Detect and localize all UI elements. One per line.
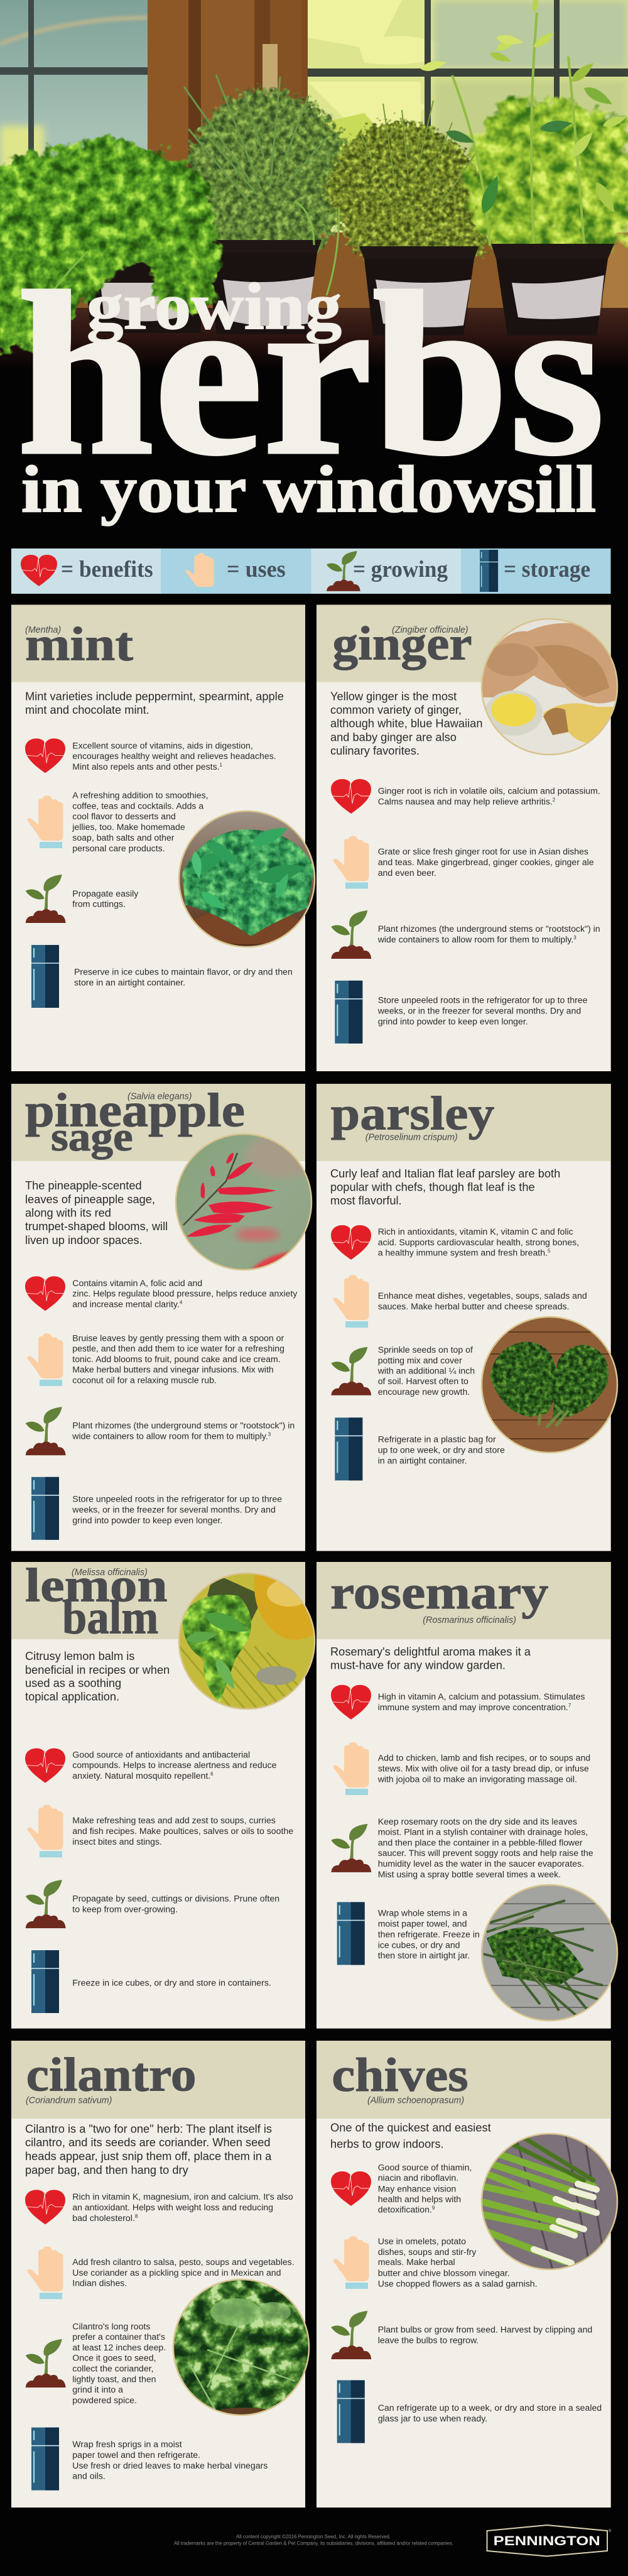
footer copyright: All trademarks are the property of Central Garden & Pet Company, its subsidiaries, divisions, affiliated and/or related companies.: [174, 2540, 453, 2546]
logo: Pennington: PENNINGTON: [494, 2534, 600, 2548]
benefits text: anxiety. Natural mosquito repellent.: [72, 1771, 210, 1781]
benefits text: 1: [220, 762, 223, 768]
uses text: cool flavor to desserts and: [72, 811, 176, 821]
icon: hand: [28, 2246, 63, 2299]
panel: ginger: [317, 605, 622, 1071]
heading: pineapple sage: [25, 1084, 245, 1160]
panel header band: [317, 1562, 611, 1639]
icon: seedling: [331, 1347, 371, 1395]
uses text: and fish recipes. Make poultices, salves or oils to soothe: [72, 1826, 293, 1836]
uses text: pestle, and then add them to ice water for a refreshing: [72, 1343, 284, 1353]
uses text: personal care products.: [72, 843, 165, 853]
icon: hand: [28, 1333, 63, 1386]
benefits text: Calms nausea and may help relieve arthritis.: [378, 797, 553, 807]
panel header band: [317, 2041, 611, 2119]
growing text: to keep from over-growing.: [72, 1904, 178, 1914]
title line: in your windowsill: in your windowsill: [21, 452, 596, 526]
panel body: [317, 1084, 611, 1551]
uses text: meals. Make herbal: [378, 2257, 455, 2267]
icon: heart: [331, 2171, 371, 2206]
growing text: leave the bulbs to regrow.: [378, 2335, 479, 2345]
benefits text: 9: [432, 2205, 435, 2211]
storage text: Freeze in ice cubes, or dry and store in containers.: [72, 1977, 271, 1987]
icon: heart: [25, 738, 65, 773]
scientific name: (Petroselinum crispum): [365, 1133, 458, 1143]
growing text: moist. Plant in a stylish container with drainage holes,: [378, 1826, 588, 1836]
photo: lemon balm and tea: [179, 1573, 315, 1710]
icon: heart: [331, 1685, 371, 1720]
storage text: then store in airtight jar.: [378, 1950, 470, 1960]
growing text: prefer a container that's: [72, 2332, 165, 2342]
legend label: growing: = growing: [353, 557, 448, 582]
icon: refrigerator: [31, 2428, 59, 2491]
heading: rosemary: rosemary: [330, 1566, 548, 1619]
uses text: Use in omelets, potato: [378, 2236, 466, 2246]
intro text: heads appear, just snip them off, place them in a: [25, 2149, 272, 2163]
storage text: paper towel and then refrigerate.: [72, 2450, 200, 2460]
growing text: of soil. Harvest often to: [378, 1376, 468, 1386]
storage text: Can refrigerate up to a week, or dry and store in a sealed: [378, 2403, 602, 2413]
growing text: Keep rosemary roots on the dry side and its leaves: [378, 1816, 577, 1826]
intro text: popular with chefs, though flat leaf is the: [330, 1181, 535, 1194]
scientific name: (Melissa officinalis): [72, 1568, 148, 1578]
legend label: uses: = uses: [227, 557, 286, 582]
storage text: in an airtight container.: [378, 1455, 467, 1465]
icon: refrigerator: [337, 2380, 365, 2443]
icon: hand: [28, 1804, 63, 1857]
growing text: wide containers to allow room for them to multiply.: [377, 934, 573, 944]
intro text: herbs to grow indoors.: [330, 2137, 444, 2151]
legend icon: heart: [21, 555, 57, 586]
heading: lemon balm: [25, 1559, 168, 1644]
icon: heart: [25, 1749, 65, 1783]
panel body: [11, 605, 305, 1071]
intro text: paper bag, and then hang to dry: [25, 2163, 189, 2176]
uses text: coffee, teas and cocktails. Adds a: [72, 800, 203, 810]
growing text: from cuttings.: [72, 898, 126, 909]
photo: potted herbs on a windowsill: [0, 0, 628, 377]
growing text: powdered spice.: [72, 2395, 137, 2405]
icon: refrigerator: [335, 1417, 362, 1480]
uses text: jellies, too. Make homemade: [72, 822, 185, 832]
legend icon: hand: [185, 553, 214, 592]
icon: seedling: [26, 1880, 66, 1928]
benefits text: Excellent source of vitamins, aids in digestion,: [72, 740, 253, 750]
photo: pineapple sage flowers: [176, 1134, 320, 1272]
icon: refrigerator: [31, 1477, 59, 1540]
panel body: [317, 2041, 611, 2508]
uses text: Indian dishes.: [72, 2278, 127, 2288]
panel header band: [317, 605, 611, 682]
growing text: Plant rhizomes (the underground stems or "rootstock") in: [378, 924, 600, 934]
growing text: potting mix and cover: [378, 1355, 462, 1365]
icon: hand: [333, 836, 369, 888]
storage text: Use fresh or dried leaves to make herbal vinegars: [72, 2460, 268, 2470]
uses text: Use coriander as a pickling spice and in Mexican and: [72, 2268, 281, 2278]
storage text: Store unpeeled roots in the refrigerator for up to three: [72, 1494, 282, 1504]
benefits text: health and helps with: [378, 2194, 461, 2204]
intro text: Curly leaf and Italian flat leaf parsley are both: [330, 1167, 560, 1180]
benefits text: acid. Supports cardiovascular health, strong bones,: [378, 1237, 579, 1247]
icon: hand: [333, 2236, 369, 2289]
scientific name: (Coriandrum sativum): [26, 2095, 112, 2105]
icon: seedling: [331, 2311, 371, 2359]
uses text: Add to chicken, lamb and fish recipes, or to soups and: [378, 1753, 590, 1763]
intro text: Cilantro is a "two for one" herb: The plant itself is: [25, 2122, 272, 2135]
heading: pineapple sage: pineapple: [25, 1084, 245, 1137]
uses text: Make herbal butters and vinegar infusions. Mix with: [72, 1365, 274, 1375]
growing text: humidity level as the water in the saucer evaporates.: [378, 1858, 584, 1869]
storage text: glass jar to use when ready.: [378, 2413, 487, 2423]
scientific name: (Rosmarinus officinalis): [423, 1615, 516, 1625]
benefits text: 7: [568, 1703, 571, 1708]
icon: heart: [331, 779, 371, 814]
benefits text: Ginger root is rich in volatile oils, calcium and potassium.: [378, 786, 600, 796]
benefits text: niacin and riboflavin.: [378, 2173, 458, 2183]
growing text: Plant rhizomes (the underground stems or "rootstock") in: [72, 1421, 295, 1431]
icon: heart: [25, 1276, 65, 1311]
scientific name: (Zingiber officinale): [392, 625, 468, 635]
photo: parsley bunches on wood: [481, 1317, 618, 1454]
heading: chives: chives: [332, 2049, 468, 2102]
heading: pineapple sage: sage: [51, 1114, 133, 1160]
legend icon: seedling: [327, 551, 360, 591]
benefits text: Rich in antioxidants, vitamin K, vitamin C and folic: [378, 1226, 573, 1236]
storage text: grind into powder to keep even longer.: [378, 1017, 528, 1027]
growing text: collect the coriander,: [72, 2364, 154, 2374]
uses text: stews. Mix with olive oil for a tasty bread dip, or infuse: [378, 1763, 589, 1773]
growing text: Once it goes to seed,: [72, 2352, 156, 2362]
icon: refrigerator: [31, 1950, 59, 2013]
benefits text: encourages healthy weight and relieves headaches.: [72, 751, 276, 761]
intro text: leaves of pineapple sage,: [25, 1192, 155, 1206]
growing text: Propagate easily: [72, 888, 139, 898]
uses text: soap, bath salts and other: [72, 832, 175, 843]
growing text: with an additional ¼ inch: [377, 1366, 475, 1376]
intro text: liven up indoor spaces.: [25, 1233, 143, 1247]
footer copyright: All content copyright ©2016 Pennington Seed, Inc. All rights Reserved.: [236, 2533, 391, 2540]
panel: cilantro: [11, 2041, 310, 2508]
growing text: Cilantro's long roots: [72, 2321, 150, 2331]
storage text: Wrap whole stems in a: [378, 1908, 467, 1918]
uses text: and teas. Make gingerbread, ginger cookies, ginger ale: [378, 857, 594, 867]
intro text: trumpet-shaped blooms, will: [25, 1220, 168, 1233]
panel header band: [317, 1084, 611, 1161]
growing text: and then place the container in a pebble-filled flower: [378, 1837, 583, 1847]
uses text: and even beer.: [378, 868, 436, 878]
storage text: store in an airtight container.: [74, 978, 185, 988]
intro text: and baby ginger are also: [330, 730, 457, 743]
storage text: Preserve in ice cubes to maintain flavor, or dry and then: [74, 966, 293, 976]
intro text: One of the quickest and easiest: [330, 2121, 491, 2134]
logo: Pennington: [487, 2525, 612, 2556]
footer copyright: [174, 2533, 453, 2546]
intro text: must-have for any window garden.: [330, 1659, 506, 1672]
heading: lemon balm: balm: [62, 1591, 158, 1644]
heading: ginger: ginger: [332, 617, 472, 670]
benefits text: May enhance vision: [378, 2183, 456, 2193]
intro text: mint and chocolate mint.: [25, 703, 149, 716]
panel body: [317, 1562, 611, 2029]
panel header band: [11, 2041, 305, 2119]
uses text: A refreshing addition to smoothies,: [72, 790, 208, 800]
intro text: topical application.: [25, 1690, 119, 1703]
icon: hand: [333, 1742, 369, 1795]
growing text: Propagate by seed, cuttings or divisions. Prune often: [72, 1894, 279, 1904]
uses text: Enhance meat dishes, vegetables, soups, salads and: [378, 1291, 587, 1301]
panel body: [11, 1562, 305, 2029]
photo: ginger root: [481, 619, 622, 756]
icon: hand: [28, 795, 63, 848]
uses text: Grate or slice fresh ginger root for use in Asian dishes: [378, 846, 588, 856]
benefits text: detoxification.: [378, 2205, 432, 2215]
growing text: 3: [573, 935, 577, 941]
icon: heart: [25, 2190, 65, 2224]
icon: seedling: [26, 875, 66, 923]
benefits text: Contains vitamin A, folic acid and: [72, 1278, 202, 1288]
heading: mint: mint: [25, 618, 133, 670]
uses text: coconut oil for a relaxing muscle rub.: [72, 1375, 217, 1385]
panel: parsley: [317, 1084, 618, 1551]
benefits text: High in vitamin A, calcium and potassium. Stimulates: [378, 1691, 585, 1701]
panel header band: [11, 1562, 305, 1639]
storage text: Refrigerate in a plastic bag for: [378, 1434, 496, 1444]
icon: seedling: [331, 910, 371, 959]
legend label: storage: = storage: [504, 557, 590, 582]
icon: hand: [333, 1275, 369, 1328]
scientific name: (Mentha): [25, 625, 61, 635]
benefits text: Mint also repels ants and other pests.: [72, 761, 220, 772]
logo: Pennington: ®: [609, 2529, 612, 2533]
heading: cilantro: cilantro: [26, 2048, 197, 2101]
benefits text: bad cholesterol.: [72, 2213, 135, 2223]
icon: refrigerator: [337, 1902, 365, 1965]
photo: cilantro leaves: [173, 2279, 310, 2420]
legend bar: [11, 548, 610, 594]
title: [17, 245, 605, 526]
benefits text: zinc. Helps regulate blood pressure, helps reduce anxiety: [72, 1288, 298, 1298]
growing text: lightly toast, and then: [72, 2374, 156, 2384]
uses text: dishes, soups and stir-fry: [378, 2247, 477, 2257]
growing text: at least 12 inches deep.: [72, 2342, 166, 2352]
growing text: Sprinkle seeds on top of: [378, 1345, 473, 1355]
benefits text: and increase mental clarity.: [72, 1299, 180, 1309]
benefits text: a healthy immune system and fresh breath.: [378, 1247, 548, 1257]
intro text: Citrusy lemon balm is: [25, 1649, 134, 1662]
intro text: most flavorful.: [330, 1194, 402, 1207]
intro text: culinary favorites.: [330, 744, 420, 757]
benefits text: 5: [548, 1248, 551, 1253]
panel: chives: [317, 2041, 618, 2508]
benefits text: compounds. Helps to increase alertness and reduce: [72, 1760, 277, 1770]
storage text: and oils.: [72, 2471, 106, 2481]
uses text: Use chopped flowers as a salad garnish.: [378, 2279, 538, 2289]
intro text: used as a soothing: [25, 1676, 121, 1689]
icon: refrigerator: [31, 945, 59, 1008]
intro text: cilantro, and its seeds are coriander. When seed: [25, 2136, 271, 2149]
panel: rosemary: [317, 1562, 618, 2029]
uses text: with jojoba oil to make an invigorating massage oil.: [377, 1774, 577, 1784]
panel: pineapple sage: [11, 1084, 320, 1551]
benefits text: 4: [180, 1299, 183, 1305]
intro text: beneficial in recipes or when: [25, 1663, 170, 1676]
uses text: Make refreshing teas and add zest to soups, curries: [72, 1815, 276, 1825]
uses text: sauces. Make herbal butter and cheese spreads.: [378, 1301, 569, 1311]
storage text: moist paper towel, and: [378, 1919, 467, 1929]
panel body: [11, 2041, 305, 2508]
growing text: saucer. This will prevent soggy roots and help raise the: [378, 1848, 593, 1858]
icon: seedling: [331, 1824, 371, 1872]
storage text: Store unpeeled roots in the refrigerator for up to three: [378, 995, 588, 1005]
benefits text: 8: [135, 2213, 138, 2219]
panel body: [317, 605, 611, 1071]
photo: rosemary sprigs on wood: [481, 1885, 618, 2021]
icon: seedling: [26, 1407, 66, 1455]
title line: herbs: herbs: [17, 245, 605, 503]
heading: parsley: parsley: [331, 1087, 494, 1140]
uses text: Add fresh cilantro to salsa, pesto, soups and vegetables.: [72, 2257, 295, 2267]
growing text: encourage new growth.: [378, 1387, 470, 1397]
benefits text: Rich in vitamin K, magnesium, iron and calcium. It's also: [72, 2191, 293, 2202]
panel header band: [11, 605, 305, 682]
uses text: Bruise leaves by gently pressing them with a spoon or: [72, 1333, 284, 1343]
icon: heart: [331, 1225, 371, 1260]
storage text: ice cubes, or dry and: [378, 1940, 460, 1950]
storage text: then refrigerate. Freeze in: [378, 1929, 480, 1940]
icon: seedling: [26, 2339, 66, 2388]
growing text: 3: [268, 1432, 271, 1438]
storage text: Wrap fresh sprigs in a moist: [72, 2439, 182, 2449]
intro text: Mint varieties include peppermint, spearmint, apple: [25, 689, 284, 702]
benefits text: 2: [553, 797, 556, 803]
benefits text: an antioxidant. Helps with weight loss and reducing: [72, 2202, 273, 2212]
panel: mint: [11, 605, 315, 1071]
intro text: Rosemary's delightful aroma makes it a: [330, 1645, 531, 1658]
growing text: Mist using a spray bottle several times a week.: [378, 1869, 561, 1879]
intro text: Yellow ginger is the most: [330, 689, 457, 702]
photo: mint leaves: [179, 810, 315, 947]
intro text: although white, blue Hawaiian: [330, 716, 482, 730]
panel body: [11, 1084, 305, 1551]
storage text: up to one week, or dry and store: [378, 1445, 505, 1455]
storage text: weeks, or in the freezer for several months. Dry and: [72, 1504, 276, 1514]
intro text: common variety of ginger,: [330, 703, 462, 716]
scientific name: (Salvia elegans): [127, 1091, 192, 1101]
benefits text: Good source of thiamin,: [378, 2163, 472, 2173]
growing text: Plant bulbs or grow from seed. Harvest by clipping and: [378, 2324, 592, 2334]
uses text: insect bites and stings.: [72, 1836, 162, 1847]
title line: growing: growing: [87, 270, 342, 343]
legend label: benefits: = benefits: [61, 557, 153, 582]
benefits text: 6: [210, 1771, 214, 1777]
growing text: grind it into a: [72, 2384, 123, 2394]
growing text: wide containers to allow room for them to multiply.: [72, 1431, 268, 1441]
storage text: weeks, or in the freezer for several months. Dry and: [377, 1006, 581, 1016]
icon: refrigerator: [335, 981, 362, 1044]
panel header band: [11, 1084, 305, 1161]
storage text: grind into powder to keep even longer.: [72, 1515, 222, 1525]
heading: lemon balm: lemon: [25, 1559, 168, 1612]
intro text: The pineapple-scented: [25, 1179, 142, 1192]
uses text: butter and chive blossom vinegar.: [378, 2268, 510, 2278]
legend icon: refrigerator: [480, 550, 498, 592]
panel: lemon balm: [11, 1559, 315, 2029]
uses text: tonic. Add blooms to fruit, pound cake and ice cream.: [72, 1354, 281, 1364]
photo: chives on wood: [481, 2133, 618, 2270]
benefits text: immune system and may improve concentration.: [378, 1702, 568, 1712]
scientific name: (Allium schoenoprasum): [367, 2095, 464, 2105]
benefits text: Good source of antioxidants and antibacterial: [72, 1750, 250, 1760]
intro text: along with its red: [25, 1206, 111, 1219]
